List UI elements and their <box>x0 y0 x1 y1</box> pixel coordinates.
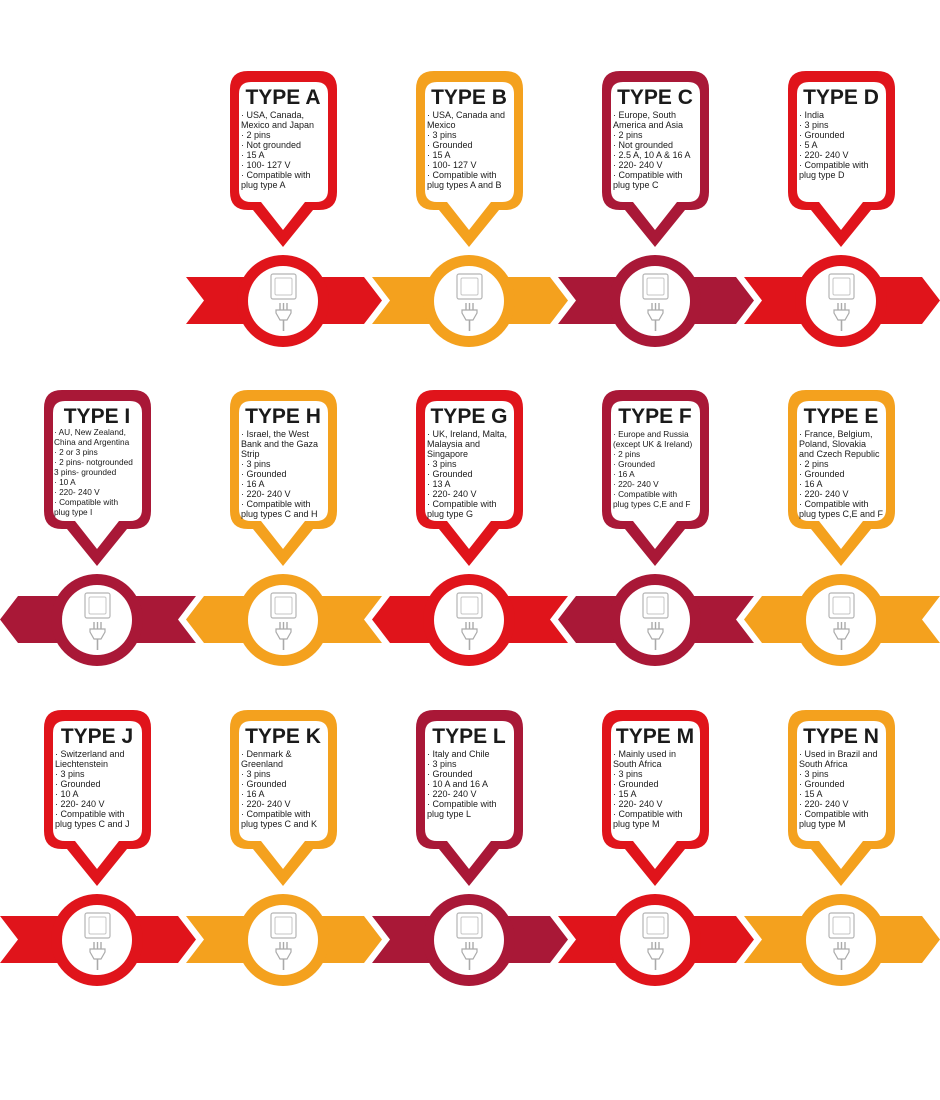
callout: Type B: Mexico <box>427 120 456 130</box>
callout: Type G: · Compatible with <box>427 499 497 509</box>
callout: Type H: plug types C and H <box>241 509 318 519</box>
callout: Type B: · 100- 127 V <box>427 160 477 170</box>
callout: Type D: · Compatible with <box>799 160 869 170</box>
callout: Type J: · Grounded <box>55 779 101 789</box>
callout: Type N: · 3 pins <box>799 769 829 779</box>
callout: Type K: · 16 A <box>241 789 265 799</box>
callout: Type F: · Europe and Russia <box>613 429 689 439</box>
row 2 chevron band <box>0 596 940 643</box>
callout: Type J: TYPE J <box>61 725 133 748</box>
callout: Type E: plug types C,E and F <box>799 509 884 519</box>
callout: Type F: · 2 pins <box>613 449 640 459</box>
callout: Type C: TYPE C <box>617 86 693 109</box>
callout: Type N: · Used in Brazil and <box>799 749 878 759</box>
callout: Type D: · 5 A <box>799 140 818 150</box>
callout: Type H: Strip <box>241 449 260 459</box>
item: Type H <box>230 390 337 666</box>
callout: Type J: · 3 pins <box>55 769 85 779</box>
callout: Type J <box>44 710 151 886</box>
callout: Type L <box>416 710 523 886</box>
callout: Type B: plug types A and B <box>427 180 502 190</box>
row 3 chevron band <box>0 916 940 963</box>
callout: Type M: · Compatible with <box>613 809 683 819</box>
callout: Type H: · Compatible with <box>241 499 311 509</box>
callout: Type H: · Israel, the West <box>241 429 309 439</box>
callout: Type G: plug type G <box>427 509 473 519</box>
callout: Type M: · Grounded <box>613 779 659 789</box>
callout: Type D: · 3 pins <box>799 120 829 130</box>
row 1 chevron band <box>186 277 940 324</box>
item: Type F <box>602 390 709 666</box>
callout: Type N: · 220- 240 V <box>799 799 849 809</box>
callout: Type N: South Africa <box>799 759 848 769</box>
icon: socket G <box>423 574 515 666</box>
callout: Type C: · 220- 240 V <box>613 160 663 170</box>
icon: socket J <box>51 894 143 986</box>
callout: Type C: · Not grounded <box>613 140 673 150</box>
callout: Type I: · 220- 240 V <box>54 487 100 497</box>
callout: Type B: · USA, Canada and <box>427 110 505 120</box>
callout: Type A: · 100- 127 V <box>241 160 291 170</box>
callout: Type I: · 2 or 3 pins <box>54 447 98 457</box>
callout: Type N <box>788 710 895 886</box>
callout: Type E <box>788 390 895 566</box>
callout: Type C <box>602 71 709 247</box>
callout: Type C: · 2 pins <box>613 130 643 140</box>
callout: Type B: · Grounded <box>427 140 473 150</box>
callout: Type M: · 220- 240 V <box>613 799 663 809</box>
callout: Type C: America and Asia <box>613 120 683 130</box>
callout: Type G: · 220- 240 V <box>427 489 477 499</box>
callout: Type D: · Grounded <box>799 130 845 140</box>
callout: Type I: · AU, New Zealand, <box>54 427 126 437</box>
item: Type M <box>602 710 709 986</box>
callout: Type I <box>44 390 151 566</box>
item: Type L <box>416 710 523 986</box>
callout: Type C: plug type C <box>613 180 659 190</box>
callout: Type M: TYPE M <box>616 725 694 748</box>
callout: Type J: · Compatible with <box>55 809 125 819</box>
callout: Type J: · Switzerland and <box>55 749 125 759</box>
callout: Type G: · Grounded <box>427 469 473 479</box>
callout: Type E: Poland, Slovakia <box>799 439 866 449</box>
callout: Type G: Singapore <box>427 449 468 459</box>
callout: Type L: · Italy and Chile <box>427 749 490 759</box>
callout: Type E: · France, Belgium, <box>799 429 873 439</box>
item: Type E <box>788 390 895 666</box>
callout: Type E: · 2 pins <box>799 459 829 469</box>
callout: Type D: plug type D <box>799 170 845 180</box>
callout: Type H: Bank and the Gaza <box>241 439 318 449</box>
callout: Type H: TYPE H <box>245 405 321 428</box>
callout: Type L: · Grounded <box>427 769 473 779</box>
callout: Type H: · 16 A <box>241 479 265 489</box>
callout: Type A: · Not grounded <box>241 140 301 150</box>
callout: Type K <box>230 710 337 886</box>
callout: Type F: · 220- 240 V <box>613 479 659 489</box>
icon: socket E <box>795 574 887 666</box>
callout: Type K: TYPE K <box>245 725 321 748</box>
icon: socket B <box>423 255 515 347</box>
icon: socket K <box>237 894 329 986</box>
item: Type G <box>416 390 523 666</box>
callout: Type I: plug type I <box>54 507 92 517</box>
callout: Type E: · 220- 240 V <box>799 489 849 499</box>
callout: Type D: TYPE D <box>803 86 879 109</box>
callout: Type G: · UK, Ireland, Malta, <box>427 429 507 439</box>
callout: Type L: · 10 A and 16 A <box>427 779 488 789</box>
callout: Type G: · 13 A <box>427 479 451 489</box>
item: Type K <box>230 710 337 986</box>
callout: Type J: · 10 A <box>55 789 79 799</box>
icon: socket M <box>609 894 701 986</box>
callout: Type K: · Denmark & <box>241 749 292 759</box>
item: Type A <box>230 71 337 347</box>
callout: Type F: · 16 A <box>613 469 635 479</box>
callout: Type E: TYPE E <box>804 405 878 428</box>
callout: Type M: · 3 pins <box>613 769 643 779</box>
icon: socket L <box>423 894 515 986</box>
callout: Type F: plug types C,E and F <box>613 499 690 509</box>
callout: Type B: · 3 pins <box>427 130 457 140</box>
callout: Type F: TYPE F <box>618 405 692 428</box>
callout: Type A: · 2 pins <box>241 130 271 140</box>
callout: Type B: TYPE B <box>431 86 507 109</box>
icon: socket D <box>795 255 887 347</box>
callout: Type F <box>602 390 709 566</box>
callout: Type L: plug type L <box>427 809 471 819</box>
callout: Type N: · 15 A <box>799 789 823 799</box>
callout: Type I: · Compatible with <box>54 497 118 507</box>
callout: Type E: · Grounded <box>799 469 845 479</box>
callout: Type D: · India <box>799 110 824 120</box>
callout: Type F: · Grounded <box>613 459 655 469</box>
callout: Type L: · Compatible with <box>427 799 497 809</box>
callout: Type K: plug types C and K <box>241 819 317 829</box>
callout: Type G: · 3 pins <box>427 459 457 469</box>
callout: Type G <box>416 390 523 566</box>
callout: Type E: and Czech Republic <box>799 449 880 459</box>
callout: Type E: · Compatible with <box>799 499 869 509</box>
callout: Type H: · Grounded <box>241 469 287 479</box>
callout: Type A: TYPE A <box>245 86 321 109</box>
callout: Type C: · Compatible with <box>613 170 683 180</box>
callout: Type K: Greenland <box>241 759 283 769</box>
callout: Type F: · Compatible with <box>613 489 677 499</box>
callout: Type B <box>416 71 523 247</box>
callout: Type A: · 15 A <box>241 150 265 160</box>
callout: Type N: plug type M <box>799 819 846 829</box>
callout: Type E: · 16 A <box>799 479 823 489</box>
callout: Type A: · Compatible with <box>241 170 311 180</box>
callout: Type N: TYPE N <box>803 725 879 748</box>
callout: Type B: · Compatible with <box>427 170 497 180</box>
callout: Type L: · 220- 240 V <box>427 789 477 799</box>
callout: Type G: Malaysia and <box>427 439 480 449</box>
callout: Type J: · 220- 240 V <box>55 799 105 809</box>
callout: Type L: TYPE L <box>432 725 506 748</box>
callout: Type I: · 10 A <box>54 477 76 487</box>
callout: Type C: · 2.5 A, 10 A & 16 A <box>613 150 691 160</box>
callout: Type A: Mexico and Japan <box>241 120 314 130</box>
callout: Type I: · 2 pins- notgrounded <box>54 457 133 467</box>
callout: Type J: plug types C and J <box>55 819 130 829</box>
callout: Type M: · Mainly used in <box>613 749 676 759</box>
item: Type B <box>416 71 523 347</box>
icon: socket C <box>609 255 701 347</box>
callout: Type A: · USA, Canada, <box>241 110 304 120</box>
callout: Type B: · 15 A <box>427 150 451 160</box>
callout: Type I: China and Argentina <box>54 437 130 447</box>
callout: Type C: · Europe, South <box>613 110 676 120</box>
callout: Type D: · 220- 240 V <box>799 150 849 160</box>
callout: Type M: plug type M <box>613 819 660 829</box>
item: Type I <box>44 390 151 666</box>
callout: Type K: · Compatible with <box>241 809 311 819</box>
callout: Type M: South Africa <box>613 759 662 769</box>
callout: Type A: plug type A <box>241 180 286 190</box>
icon: socket I <box>51 574 143 666</box>
callout: Type K: · Grounded <box>241 779 287 789</box>
item: Type D <box>788 71 895 347</box>
icon: socket N <box>795 894 887 986</box>
callout: Type M <box>602 710 709 886</box>
callout: Type N: · Grounded <box>799 779 845 789</box>
callout: Type N: · Compatible with <box>799 809 869 819</box>
callout: Type K: · 220- 240 V <box>241 799 291 809</box>
icon: socket A <box>237 255 329 347</box>
callout: Type H: · 3 pins <box>241 459 271 469</box>
item: Type C <box>602 71 709 347</box>
icon: socket F <box>609 574 701 666</box>
item: Type N <box>788 710 895 986</box>
callout: Type A <box>230 71 337 247</box>
callout: Type G: TYPE G <box>430 405 508 428</box>
callout: Type J: Liechtenstein <box>55 759 108 769</box>
callout: Type H <box>230 390 337 566</box>
icon: socket H <box>237 574 329 666</box>
callout: Type L: · 3 pins <box>427 759 457 769</box>
callout: Type I: 3 pins- grounded <box>54 467 117 477</box>
callout: Type H: · 220- 240 V <box>241 489 291 499</box>
callout: Type I: TYPE I <box>64 405 130 428</box>
item: Type J <box>44 710 151 986</box>
callout: Type F: (except UK & Ireland) <box>613 439 693 449</box>
callout: Type D <box>788 71 895 247</box>
callout: Type K: · 3 pins <box>241 769 271 779</box>
callout: Type M: · 15 A <box>613 789 637 799</box>
